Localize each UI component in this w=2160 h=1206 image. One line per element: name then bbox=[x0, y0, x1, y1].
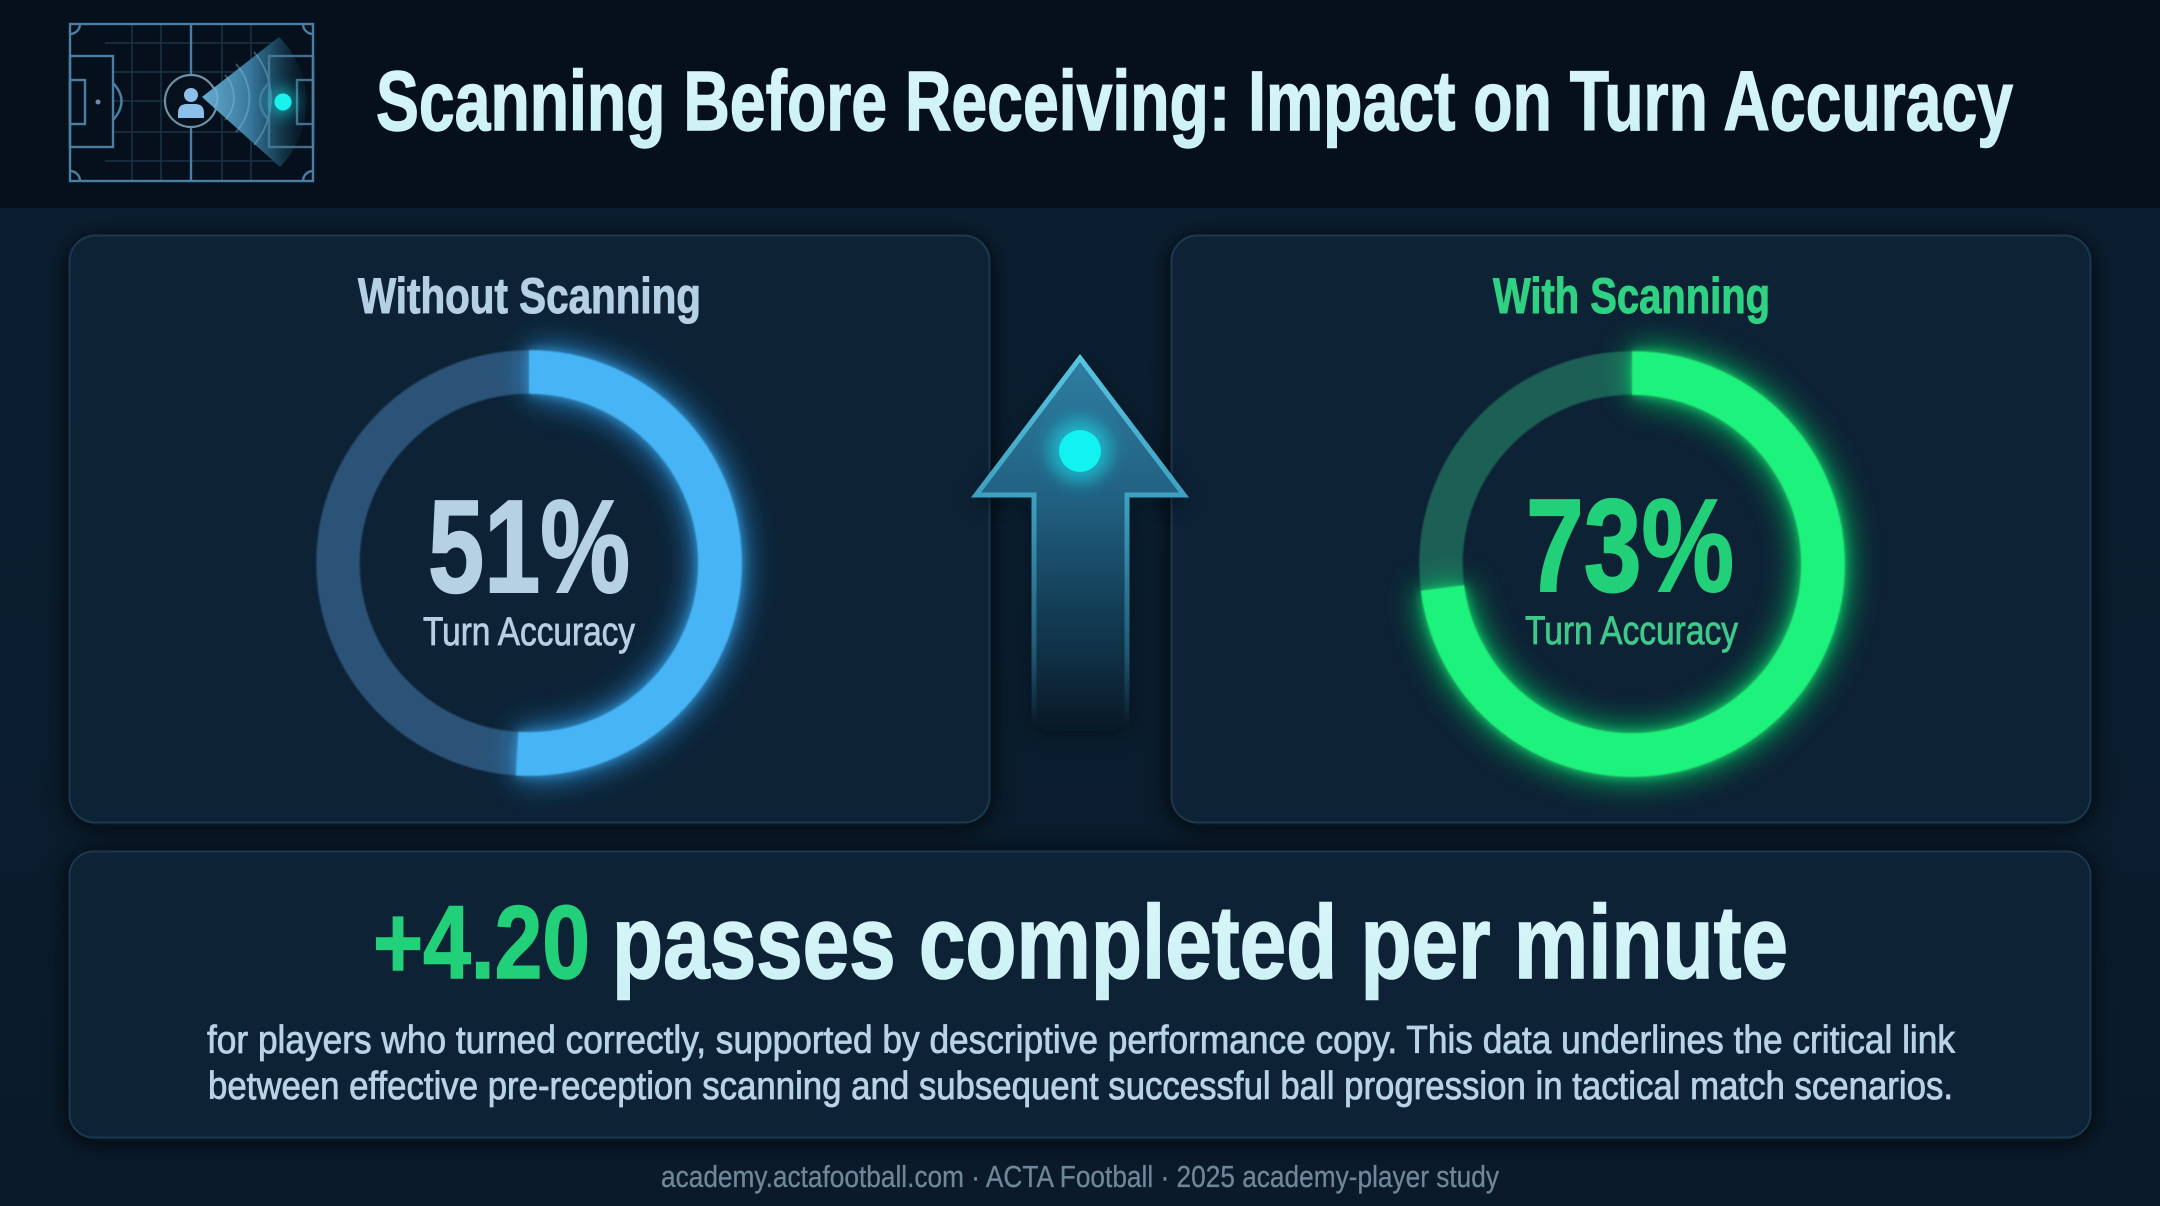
label: turn accuracy: Turn Accuracy bbox=[423, 610, 635, 654]
panel: without scanning bbox=[70, 236, 990, 822]
value: 51%: 51% bbox=[428, 473, 630, 620]
description text bbox=[207, 1019, 1955, 1108]
icon: pitch with scanning cone bbox=[70, 23, 313, 181]
description text: between effective pre-reception scanning and subsequent successful ball progression in tactical match scenarios. bbox=[208, 1065, 1953, 1108]
header band bbox=[0, 0, 2160, 208]
value: +4.20: +4.20 bbox=[373, 885, 590, 1001]
donut chart: 51 percent bbox=[338, 372, 720, 754]
panel: with scanning bbox=[1172, 236, 2090, 822]
description text: for players who turned correctly, supported by descriptive performance copy. This data underlines the critical link bbox=[207, 1019, 1955, 1062]
panel: passes completed callout bbox=[70, 852, 2090, 1138]
stat headline bbox=[373, 885, 1788, 1001]
arrow: upward improvement bbox=[974, 356, 1186, 725]
donut chart: 73 percent bbox=[1441, 373, 1823, 755]
footer source line: academy.actafootball.com · ACTA Football · 2025 academy-player study bbox=[661, 1159, 1499, 1194]
heading: without scanning: Without Scanning bbox=[358, 268, 701, 324]
label: passes completed per minute: passes completed per minute bbox=[612, 885, 1788, 1001]
label: turn accuracy: Turn Accuracy bbox=[1525, 609, 1738, 653]
heading: with scanning: With Scanning bbox=[1493, 268, 1770, 324]
value: 73%: 73% bbox=[1526, 472, 1734, 619]
